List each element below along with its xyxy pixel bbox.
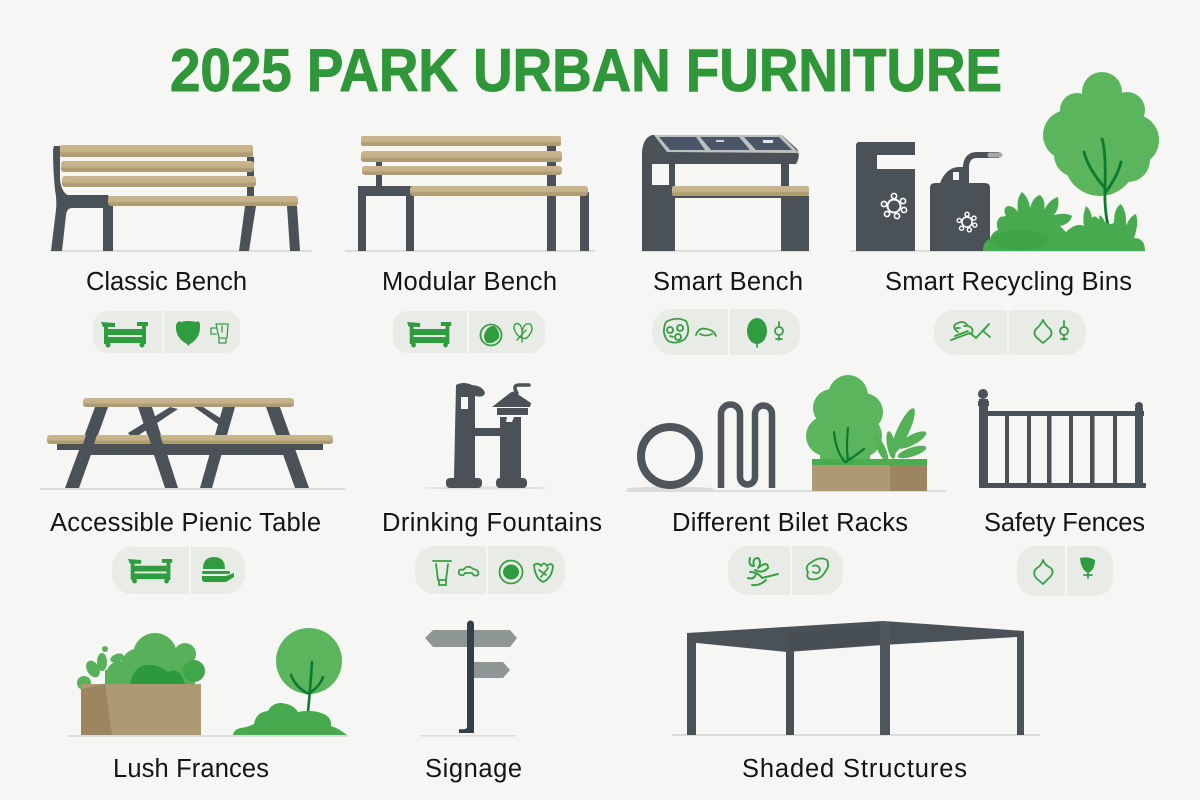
feature icons: classic bench [93, 311, 240, 353]
title: 2025 PARK URBAN FURNITURE [170, 37, 1002, 104]
label: Different Bilet Racks: Different Bilet Racks [672, 509, 908, 537]
feature icons: safety fences [1017, 546, 1113, 596]
illustration: planter and tree [68, 628, 348, 737]
feature icons: modular bench [393, 311, 545, 353]
label: Safety Fences: Safety Fences [984, 509, 1145, 537]
panel: safety fences [978, 389, 1146, 596]
label: Modular Bench: Modular Bench [382, 268, 557, 296]
illustration: modular bench [345, 136, 595, 252]
planter with plants [806, 375, 928, 491]
panel: drinking fountains [382, 383, 602, 594]
feature icons: smart bench [652, 309, 800, 355]
panel: smart recycling bins [850, 72, 1159, 355]
bush [233, 703, 347, 735]
label: Drinking Fountains: Drinking Fountains [382, 509, 602, 537]
label: Smart Bench: Smart Bench [653, 268, 803, 296]
panel: lush planters [68, 628, 348, 783]
feature icons: smart recycling bins [934, 310, 1086, 355]
bin with gear symbol [856, 142, 915, 251]
illustration: drinking fountains [424, 383, 548, 490]
feature icons: drinking fountains [415, 546, 565, 594]
panel: smart bench [641, 135, 811, 355]
illustration: bike racks and planter [626, 375, 946, 492]
panel: shaded structures [672, 621, 1040, 783]
panel: accessible picnic table [40, 398, 345, 594]
tree [276, 628, 342, 712]
bin with spout [930, 155, 1000, 251]
panel: classic bench [50, 145, 312, 353]
illustration: signpost [420, 620, 517, 736]
label: Classic Bench: Classic Bench [86, 268, 247, 296]
tree [1043, 72, 1159, 232]
panel: signage [420, 620, 522, 783]
label: Accessible Pienic Table: Accessible Pienic Table [50, 509, 321, 537]
feature icons: accessible picnic table [112, 547, 245, 594]
bushes [983, 192, 1145, 251]
illustration: classic bench [50, 145, 312, 252]
label: Signage: Signage [425, 755, 522, 783]
illustration: smart bench with solar roof [641, 135, 811, 252]
label: Smart Recycling Bins: Smart Recycling Bins [885, 268, 1132, 296]
feature icons: different bike racks [728, 546, 843, 595]
illustration: recycling bins, bushes and tree [850, 72, 1159, 252]
illustration: shade pavilion [672, 621, 1040, 736]
serpentine rack [721, 404, 772, 488]
panel: modular bench [345, 136, 595, 353]
illustration: picnic table [40, 398, 345, 490]
ring rack [641, 427, 699, 485]
planter with foliage [77, 633, 205, 735]
label: Shaded Structures: Shaded Structures [742, 755, 967, 783]
panel: different bike racks [626, 375, 946, 595]
label: Lush Frances: Lush Frances [113, 755, 269, 783]
illustration: safety fence [978, 389, 1146, 488]
